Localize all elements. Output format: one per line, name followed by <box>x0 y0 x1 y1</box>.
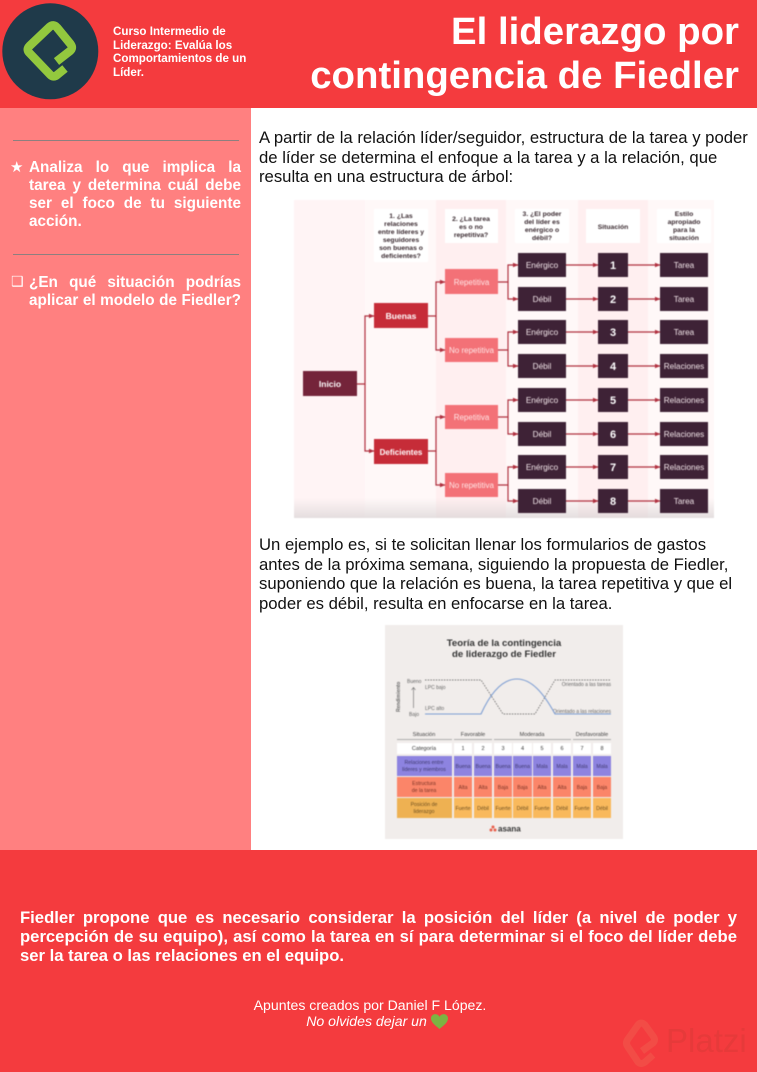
root and relation nodes: Inicio <box>319 379 341 389</box>
prompt: star bullet: tarea y determina cuál debe <box>29 177 241 194</box>
conclusion text: percepción de su equipo), así como la tarea en sí para determinar si el foco del líder debe <box>20 926 737 946</box>
situation table: Fuerte <box>456 806 471 812</box>
Platzi watermark <box>623 1020 747 1067</box>
chart title <box>447 638 562 660</box>
header band <box>0 0 757 108</box>
power nodes <box>518 253 566 513</box>
prompt: square bullet <box>11 274 241 309</box>
performance curves: Orientado a las relaciones <box>553 709 611 715</box>
situation table: 2 <box>481 746 485 752</box>
prompt: star bullet: Analiza lo que implica la <box>29 159 241 176</box>
situation table: 5 <box>540 746 544 752</box>
column headers: deficientes? <box>381 253 421 260</box>
icon: course logo <box>2 3 98 100</box>
column headers: seguidores <box>383 237 419 244</box>
credits <box>254 997 486 1029</box>
prompt: square bullet: aplicar el modelo de Fiedler? <box>29 292 241 309</box>
situation table: Alta <box>459 785 468 791</box>
style nodes: Tarea <box>674 261 695 270</box>
column headers: del líder es <box>524 219 560 226</box>
column headers: repetitiva? <box>454 232 488 239</box>
situation table: Buena <box>455 764 471 770</box>
power nodes: Débil <box>533 430 552 439</box>
situation table: Estructura <box>412 781 436 787</box>
performance curves: Orientado a las tareas <box>562 682 611 688</box>
situation table: Buena <box>495 764 511 770</box>
situation nodes: 6 <box>610 429 616 441</box>
column headers: relaciones <box>384 221 418 228</box>
task nodes: No repetitiva <box>449 481 494 490</box>
power nodes: Enérgico <box>526 396 559 405</box>
panel: footer <box>0 850 757 1072</box>
situation nodes: 1 <box>610 260 616 272</box>
column headers: entre líderes y <box>378 229 424 236</box>
performance curves: Rendimiento <box>396 682 402 712</box>
power nodes: Débil <box>533 497 552 506</box>
power nodes: Enérgico <box>526 463 559 472</box>
column headers: enérgico o <box>525 227 559 234</box>
situation table: Relaciones entre <box>405 760 444 766</box>
title: El liderazgo por <box>451 10 739 52</box>
column headers: para la <box>673 227 695 234</box>
column headers <box>374 209 711 262</box>
conclusion text: ser la tarea o las relaciones en el equipo. <box>20 946 344 964</box>
situation table: Moderada <box>520 732 545 738</box>
performance curves: Bajo <box>409 712 419 718</box>
situation table: Favorable <box>461 732 485 738</box>
performance curves: LPC alto <box>425 706 444 712</box>
situation table: 4 <box>521 746 524 752</box>
tree connectors <box>356 265 660 501</box>
title <box>310 10 739 96</box>
performance curves: Bueno <box>407 679 422 685</box>
example text <box>259 535 732 612</box>
prompt: square bullet: ¿En qué situación podrías <box>29 274 241 291</box>
column headers: 2. ¿La tarea <box>452 216 490 223</box>
chart: Fiedler contingency theory <box>385 625 623 839</box>
prompt: star bullet: acción. <box>29 213 82 230</box>
situation table: Baja <box>577 785 587 791</box>
root and relation nodes <box>303 303 428 464</box>
credits: No olvides dejar un <box>306 1013 427 1029</box>
situation table: Alta <box>479 785 488 791</box>
situation nodes: 4 <box>610 361 617 373</box>
situation table: Baja <box>517 785 528 791</box>
column headers: apropiado <box>668 219 700 226</box>
performance curves: LPC bajo <box>425 685 446 691</box>
task nodes: Repetitiva <box>454 413 490 422</box>
column headers: 1. ¿Las <box>389 213 413 220</box>
situation table: Alta <box>538 785 547 791</box>
style nodes: Tarea <box>674 295 695 304</box>
situation table: Mala <box>556 764 568 770</box>
situation nodes: 5 <box>610 395 616 407</box>
task nodes <box>445 269 498 497</box>
situation table: Débil <box>556 806 568 812</box>
power nodes: Débil <box>533 362 552 371</box>
example text: suponiendo que la relación es buena, la tarea repetitiva y que el <box>259 574 732 593</box>
prompt: square bullet: ❑ <box>11 274 24 290</box>
situation nodes: 7 <box>610 462 616 474</box>
situation table: Débil <box>517 806 528 812</box>
column headers: Situación <box>598 224 628 231</box>
title: contingencia de Fiedler <box>310 54 739 96</box>
column headers: es o no <box>459 224 483 231</box>
style nodes: Relaciones <box>664 396 704 405</box>
situation nodes: 3 <box>610 327 616 339</box>
situation table: Fuerte <box>574 806 590 812</box>
prompt: star bullet: ser el foco de tu siguiente <box>29 195 241 212</box>
power nodes: Débil <box>533 295 552 304</box>
intro text: A partir de la relación líder/seguidor, estructura de la tarea y poder <box>259 128 748 147</box>
style nodes: Relaciones <box>664 463 704 472</box>
task nodes: Repetitiva <box>454 278 490 287</box>
situation table: Fuerte <box>496 806 511 812</box>
situation table: liderazgo <box>413 809 435 815</box>
situation table: 3 <box>501 746 505 752</box>
situation nodes <box>598 253 628 513</box>
intro text: resulta en una estructura de árbol: <box>259 167 513 186</box>
root and relation nodes: Buenas <box>386 311 417 321</box>
chart: decision tree <box>294 200 714 518</box>
style nodes: Relaciones <box>664 430 704 439</box>
example text: antes de la próxima semana, siguiendo la propuesta de Fiedler, <box>259 554 728 574</box>
conclusion text <box>20 908 737 964</box>
situation table: 8 <box>600 746 604 752</box>
power nodes: Enérgico <box>526 261 559 270</box>
intro text: de líder se determina el enfoque a la tarea y a la relación, que <box>259 148 717 166</box>
situation table: Baja <box>597 785 607 791</box>
situation table: Posición de <box>411 802 438 808</box>
situation table: Categoría <box>412 746 437 752</box>
situation table: Situación <box>413 732 435 738</box>
situation table: Mala <box>596 764 608 770</box>
intro text <box>259 128 748 186</box>
root and relation nodes: Deficientes <box>380 448 423 457</box>
situation table: Buena <box>515 764 530 770</box>
example text: Un ejemplo es, si te solicitan llenar los formularios de gastos <box>259 535 706 554</box>
power nodes: Enérgico <box>526 328 559 337</box>
situation table: Débil <box>596 806 608 812</box>
situation table: Desfavorable <box>576 732 608 738</box>
style nodes <box>660 253 708 513</box>
conclusion text: Fiedler propone que es necesario considerar la posición del líder (a nivel de poder y <box>20 908 737 926</box>
situation table: de la tarea <box>412 788 436 794</box>
performance curves <box>396 679 611 718</box>
situation table: 7 <box>580 746 584 752</box>
situation table: 6 <box>560 746 564 752</box>
situation nodes: 2 <box>610 294 616 306</box>
column headers: Estilo <box>675 211 693 218</box>
column headers: 3. ¿El poder <box>523 211 562 218</box>
situation table: Alta <box>558 785 567 791</box>
situation table: líderes y miembros <box>402 767 446 773</box>
situation table: Mala <box>536 764 548 770</box>
chart title: de liderazgo de Fiedler <box>452 649 556 660</box>
style nodes: Relaciones <box>664 362 704 371</box>
situation table: Buena <box>475 764 491 770</box>
column headers: son buenas o <box>379 245 423 252</box>
situation table: Débil <box>477 806 489 812</box>
example text: poder es débil, resulta en enfocarse en la tarea. <box>259 594 612 612</box>
prompt: star bullet: ★ <box>10 158 23 176</box>
situation table: Fuerte <box>534 806 550 812</box>
task nodes: No repetitiva <box>449 346 494 355</box>
panel: left sidebar <box>0 108 251 850</box>
column headers: débil? <box>532 235 552 242</box>
situation table: Mala <box>576 764 588 770</box>
course name: Curso Intermedio de Liderazgo: Evalúa los Comportamientos de un Líder. <box>113 25 246 78</box>
style nodes: Tarea <box>674 328 695 337</box>
prompt: star bullet <box>10 158 242 230</box>
asana logo: asana <box>498 824 521 834</box>
style nodes: Tarea <box>674 497 695 506</box>
situation table: 1 <box>461 746 465 752</box>
Platzi watermark: Platzi <box>666 1022 747 1059</box>
chart title: Teoría de la contingencia <box>447 638 562 649</box>
column headers: situación <box>669 235 699 242</box>
credits: Apuntes creados por Daniel F López. <box>254 997 486 1013</box>
situation table: Baja <box>498 785 508 791</box>
situation table <box>397 732 611 818</box>
situation nodes: 8 <box>610 496 616 508</box>
